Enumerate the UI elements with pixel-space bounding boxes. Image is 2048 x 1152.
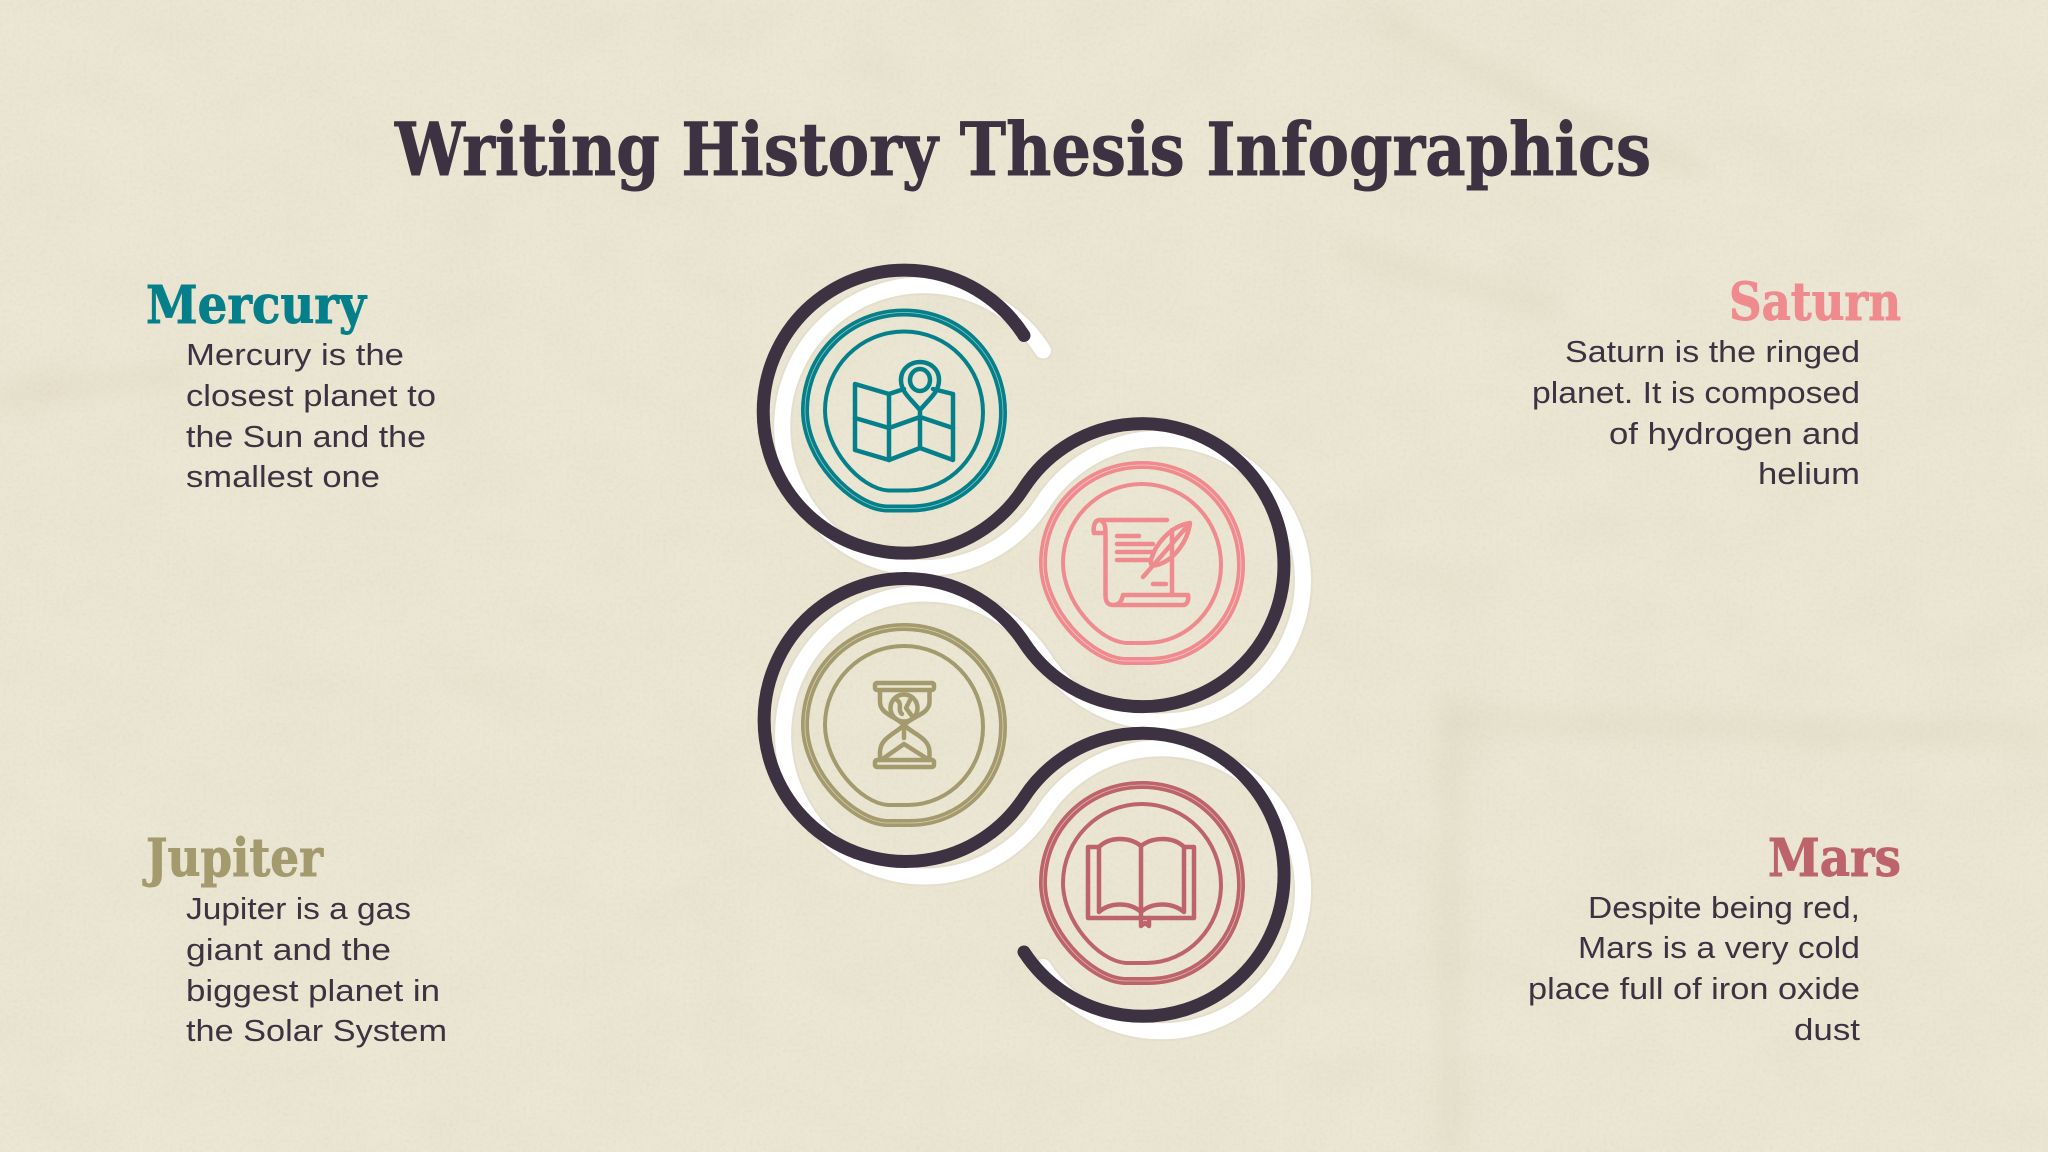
text block: Jupiter description: the Solar System xyxy=(186,1013,447,1048)
text block: Saturn description: helium xyxy=(1758,456,1860,491)
text block: Jupiter description: biggest planet in xyxy=(186,973,440,1008)
text block: Mars description: Mars is a very cold xyxy=(1578,930,1860,965)
text block: Saturn description: Saturn is the ringed xyxy=(1565,334,1860,369)
text block: Mars description: Despite being red, xyxy=(1588,890,1860,925)
text block: Mercury description: closest planet to xyxy=(186,378,436,413)
text block: Mars description xyxy=(1528,890,1860,1047)
winding path xyxy=(763,270,1303,1031)
heading: Mars: Mars xyxy=(1768,828,1901,889)
heading: Saturn: Saturn xyxy=(1729,272,1901,333)
text block: Mercury description: Mercury is the xyxy=(186,337,404,372)
panel: Mercury xyxy=(146,275,436,494)
text block: Mercury description: smallest one xyxy=(186,459,380,494)
text block: Jupiter description: Jupiter is a gas xyxy=(186,891,411,926)
text block: Mars description: place full of iron oxide xyxy=(1528,971,1860,1006)
text block: Jupiter description: giant and the xyxy=(186,932,391,967)
heading: Jupiter: Jupiter xyxy=(143,828,324,889)
text block: Jupiter description xyxy=(186,891,447,1048)
icon: map with pin xyxy=(805,312,1003,508)
icon: hourglass with globe xyxy=(805,627,1003,823)
panel: Jupiter xyxy=(143,828,447,1048)
panel: Saturn xyxy=(1532,272,1901,491)
text block: Mars description: dust xyxy=(1794,1012,1860,1047)
text block: Mercury description xyxy=(186,337,436,494)
text block: Mercury description: the Sun and the xyxy=(186,419,426,454)
text block: Saturn description: planet. It is composed xyxy=(1532,375,1860,410)
panel: Mars xyxy=(1528,828,1901,1047)
icon: scroll and quill xyxy=(1043,465,1241,661)
heading: Mercury: Mercury xyxy=(146,275,368,336)
text block: Saturn description: of hydrogen and xyxy=(1609,416,1860,451)
icon: open book xyxy=(1043,785,1241,981)
title: Writing History Thesis Infographics xyxy=(394,107,1651,193)
text block: Saturn description xyxy=(1532,334,1860,491)
